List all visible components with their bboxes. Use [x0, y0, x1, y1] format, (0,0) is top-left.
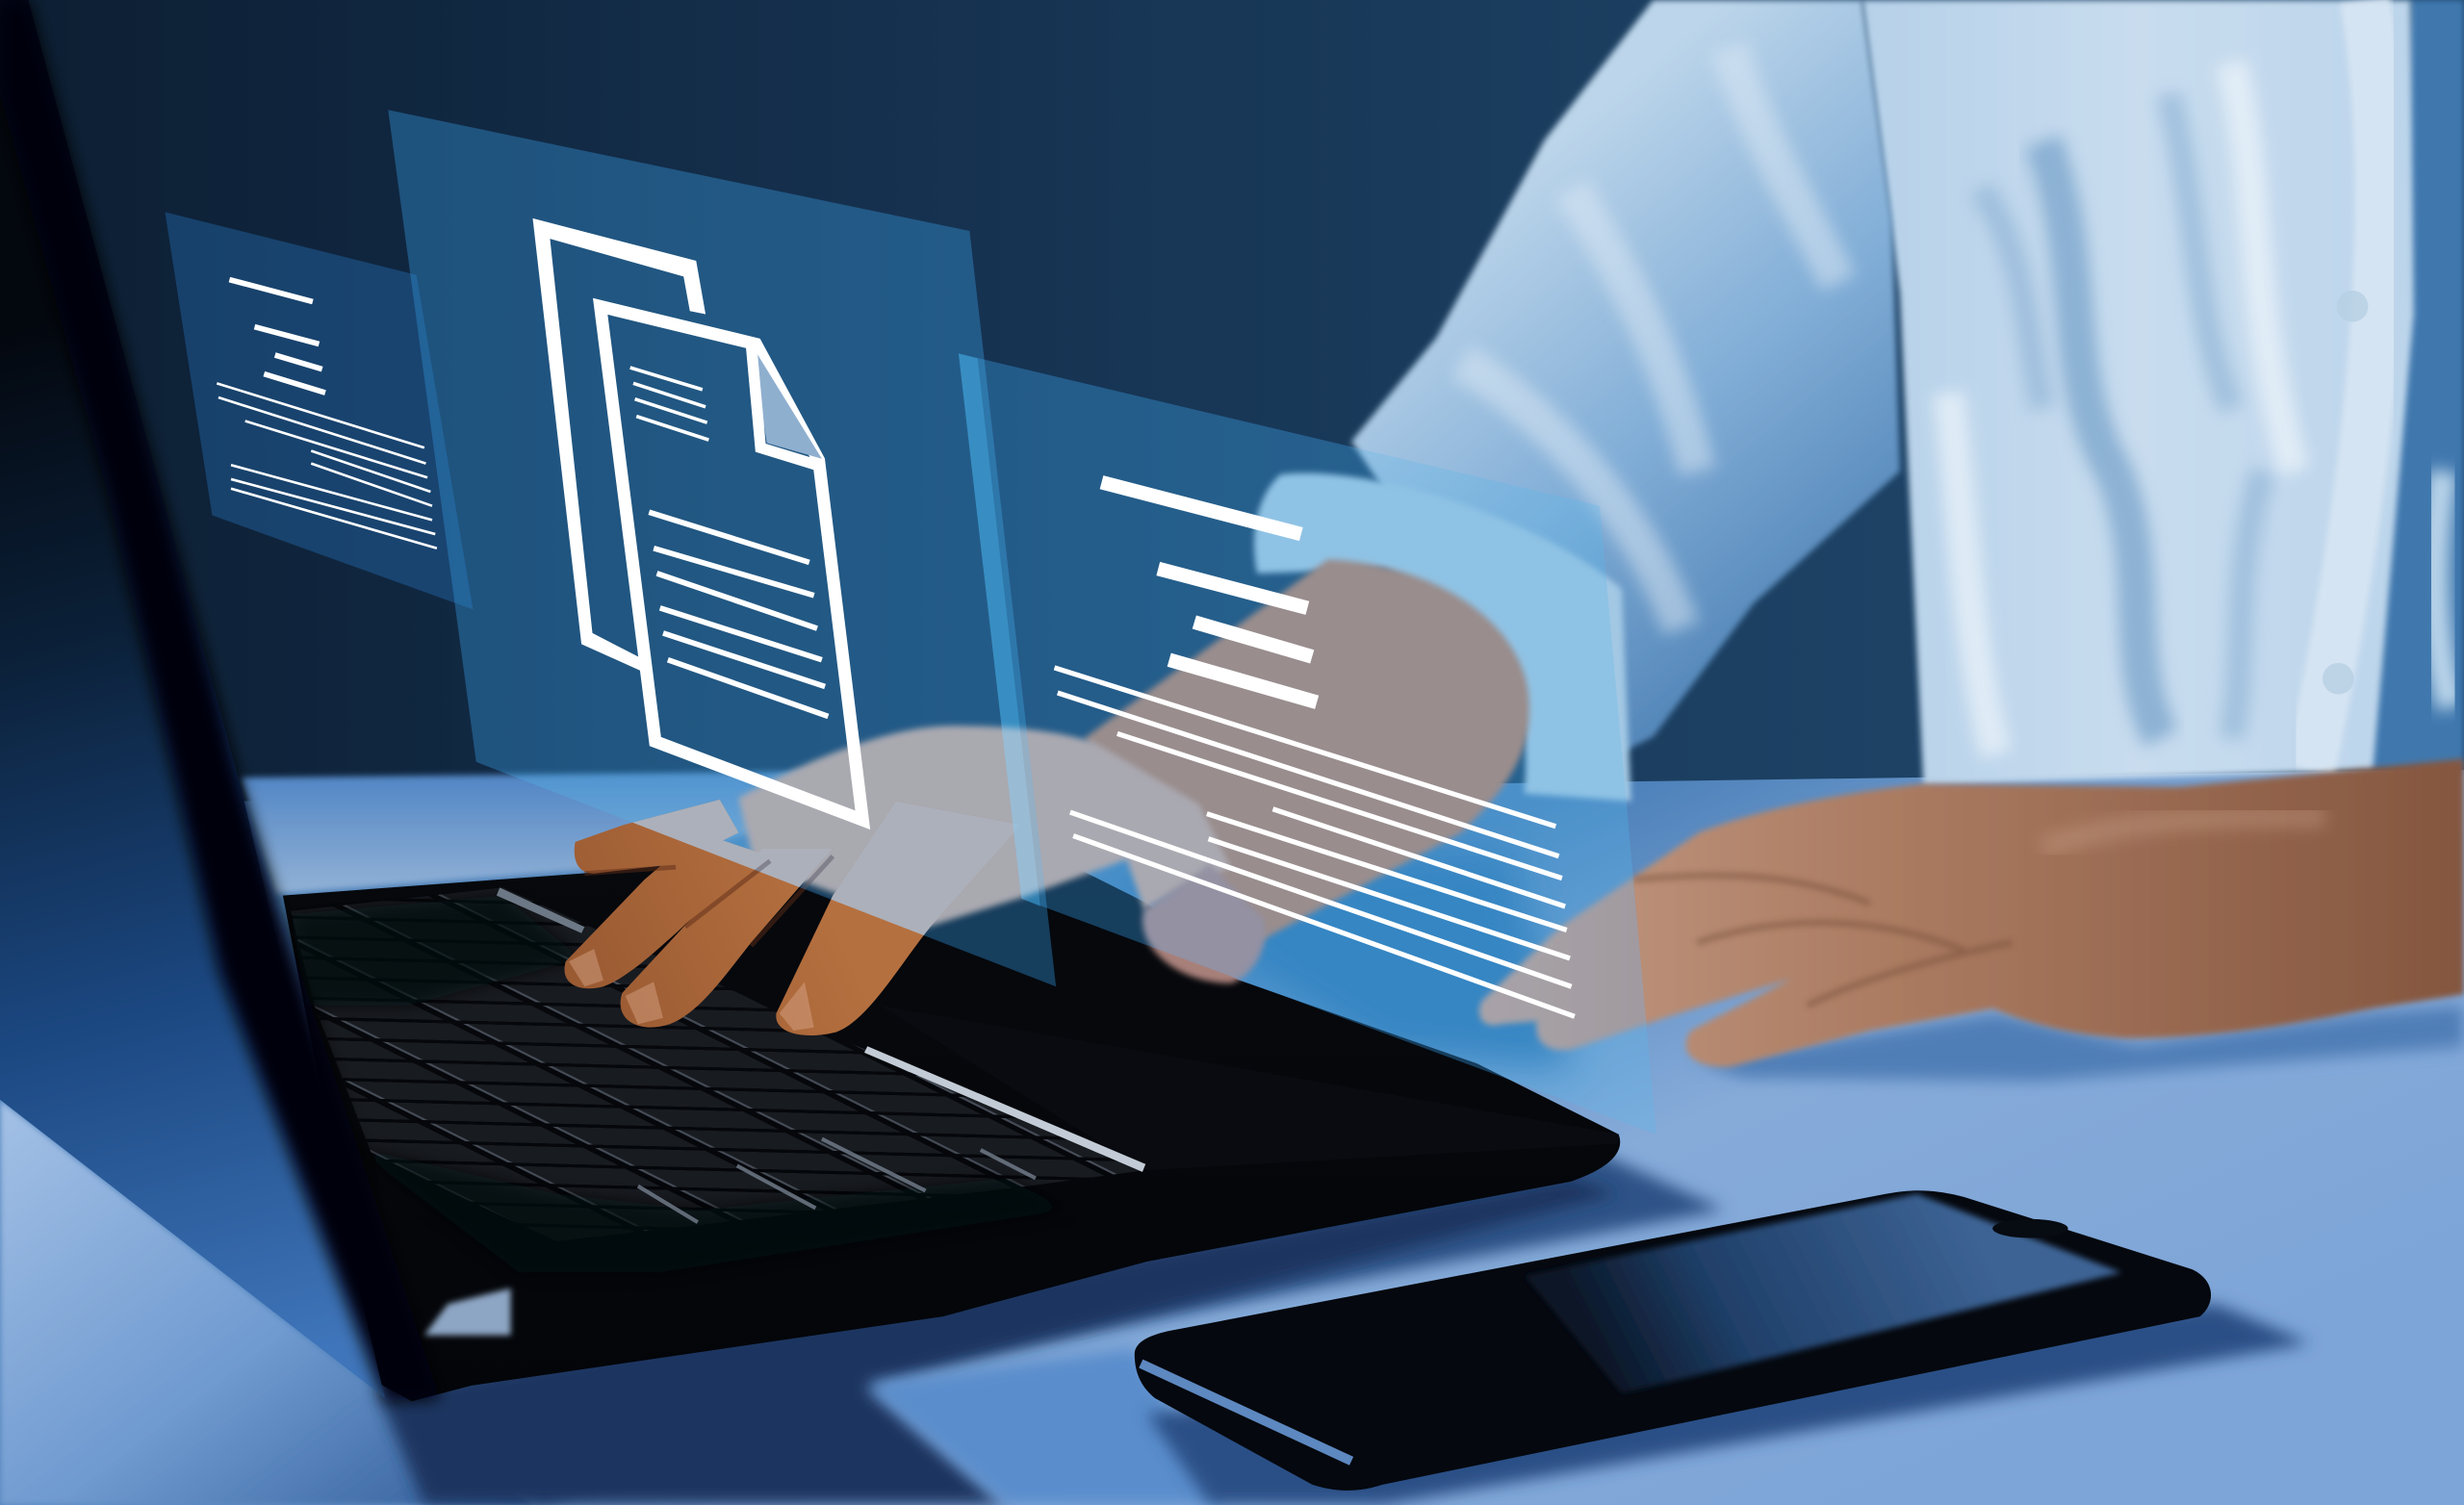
keyboard fade top: [291, 896, 581, 1006]
shirt torso: [1862, 0, 2464, 785]
desk lit patch: [867, 1348, 1225, 1505]
front page outline: [601, 306, 862, 820]
laptop shadow on desk: [377, 1155, 1724, 1505]
hand back: [738, 726, 1230, 927]
shirt cuff: [1254, 473, 1631, 802]
left forearm: [1085, 559, 1529, 943]
lid bezel: [0, 0, 440, 1401]
floating panel: small left document: [165, 212, 473, 609]
laptop lid: [0, 0, 511, 1401]
keyboard keys: [291, 887, 1144, 1241]
shirt sleeve: [1254, 0, 1900, 802]
smartphone: [1135, 1190, 2211, 1491]
key edge highlights: [638, 1139, 1036, 1222]
fingernails: [569, 949, 814, 1031]
knuckle shading: [1634, 876, 2012, 1006]
keyboard highlight edge: [864, 1046, 1145, 1172]
folded corner: [751, 344, 822, 459]
floating panel: central document icon: [388, 110, 1056, 986]
phone shadow: [1147, 1304, 2310, 1505]
keyboard fade bottom: [353, 1147, 1068, 1272]
floating panel: large right document: [959, 353, 1656, 1135]
laptop base with keyboard: [283, 832, 1620, 1401]
fingers: [564, 800, 1021, 1035]
text lines: [630, 368, 828, 716]
desk surface: [0, 770, 2464, 1505]
right hand: [1479, 759, 2464, 1067]
laptop foot highlight: [424, 1288, 511, 1336]
finger shading: [584, 856, 833, 946]
right hand shadow: [1697, 1006, 2464, 1081]
thumb: [1142, 864, 1265, 983]
left hand: [564, 726, 1265, 1035]
back page outline: [532, 218, 706, 673]
